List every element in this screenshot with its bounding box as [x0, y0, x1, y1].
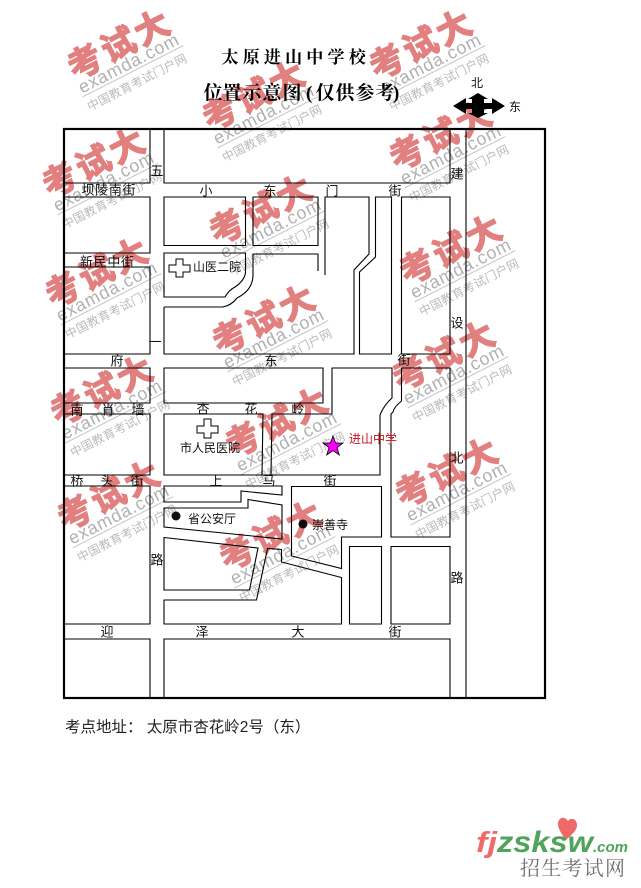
icon: temple dot	[298, 520, 308, 528]
road labels: 新民中街	[80, 254, 134, 270]
road labels: 街	[130, 474, 144, 488]
road labels	[70, 164, 464, 640]
watermark 10: examda.com	[400, 341, 507, 408]
watermark 15	[213, 494, 344, 605]
watermark 2: 中国教育考试门户网	[219, 102, 324, 165]
road labels: 五	[150, 164, 164, 178]
road labels: 泽	[195, 624, 209, 640]
icon: hospital cross city	[197, 419, 218, 438]
road labels: 门	[325, 184, 339, 198]
icon: public security dot	[172, 512, 180, 520]
watermark 6: 考试大	[204, 169, 318, 253]
watermark 13: 中国教育考试门户网	[74, 502, 179, 565]
watermark 11: examda.com	[58, 376, 165, 443]
watermark 3: 考试大	[364, 4, 478, 88]
watermark 9: 中国教育考试门户网	[229, 326, 334, 389]
road labels: 南	[70, 402, 84, 418]
watermark 15: 中国教育考试门户网	[236, 542, 341, 605]
icon: school star	[323, 436, 343, 455]
watermark 14: 中国教育考试门户网	[412, 479, 517, 542]
road labels: 杏	[196, 402, 210, 416]
watermark 9: 考试大	[207, 279, 321, 363]
watermark 11	[44, 349, 175, 460]
watermark 11: 考试大	[45, 350, 159, 434]
watermark 12	[219, 381, 350, 492]
watermark 13: examda.com	[65, 481, 172, 548]
road network and city blocks	[64, 129, 466, 698]
road labels: 大	[291, 624, 305, 640]
watermark 3: examda.com	[377, 30, 484, 97]
watermark 12: 中国教育考试门户网	[242, 429, 347, 492]
watermark 13: 考试大	[52, 455, 166, 539]
watermark 7: 考试大	[394, 209, 508, 293]
watermark 10	[386, 314, 517, 425]
road labels: 岭	[291, 402, 305, 416]
subtitle: 位置示意图(仅供参考)	[204, 81, 399, 104]
watermark 2: 考试大	[197, 55, 311, 139]
watermark 5: examda.com	[50, 148, 157, 215]
watermark 3	[363, 3, 494, 114]
watermark 11: 中国教育考试门户网	[67, 397, 172, 460]
road labels: 马	[262, 474, 276, 488]
label: jinshan school: 进山中学	[349, 431, 397, 446]
watermark 2: examda.com	[210, 81, 317, 148]
logo heart	[558, 818, 577, 840]
road labels: 一	[148, 334, 162, 350]
watermark 15: 考试大	[214, 495, 328, 579]
road labels: 北	[450, 450, 464, 466]
watermark 5: 中国教育考试门户网	[59, 169, 164, 232]
compass arrows	[453, 93, 505, 118]
watermark 7: examda.com	[407, 235, 514, 302]
watermark 9: examda.com	[220, 305, 327, 372]
road labels: 街	[323, 474, 337, 488]
watermark 5: 考试大	[37, 122, 151, 206]
label: public security bureau: 省公安厅	[188, 511, 236, 526]
watermark 4	[383, 94, 514, 205]
road labels: 府	[110, 354, 124, 368]
watermark 1	[61, 3, 192, 114]
road labels: 坝陵南街	[82, 182, 136, 198]
compass label north: 北	[471, 76, 483, 90]
road labels: 小	[199, 184, 213, 198]
watermark 2	[196, 54, 327, 165]
road labels: 墙	[131, 402, 145, 418]
watermark 15: examda.com	[227, 521, 334, 588]
road labels: 桥	[70, 474, 84, 488]
map	[64, 129, 545, 698]
map frame	[64, 129, 545, 698]
compass label east: 东	[509, 100, 521, 114]
watermark 7	[393, 208, 524, 319]
label: chongshan temple: 崇善寺	[312, 517, 348, 532]
watermark 1: 考试大	[62, 4, 176, 88]
label: shanyi second hospital: 山医二院	[193, 260, 241, 274]
site logo	[476, 818, 628, 880]
watermark 1: examda.com	[75, 30, 182, 97]
logo red letters: fj	[476, 827, 498, 859]
road labels: 上	[209, 474, 223, 488]
watermark 7: 中国教育考试门户网	[416, 256, 521, 319]
logo green letters: zsksw	[496, 826, 595, 859]
title: 太原进山中学校	[222, 47, 368, 67]
road labels: 街	[388, 184, 402, 198]
watermark 6: 中国教育考试门户网	[226, 216, 331, 279]
road labels: 路	[450, 570, 464, 586]
road labels: 东	[263, 184, 277, 198]
watermark 6	[203, 168, 334, 279]
watermark 1: 中国教育考试门户网	[84, 51, 189, 114]
logo tagline: 招生考试网	[520, 857, 625, 880]
watermark 4: examda.com	[397, 121, 504, 188]
road labels: 花	[244, 402, 258, 416]
road labels: 东	[264, 354, 278, 368]
road labels: 迎	[100, 624, 114, 640]
watermark 6: examda.com	[217, 195, 324, 262]
watermark 14: 考试大	[390, 432, 504, 516]
road labels: 街	[397, 352, 411, 368]
watermark 14	[389, 431, 520, 542]
logo domain suffix: .com	[593, 839, 628, 856]
road labels: 肖	[101, 402, 115, 418]
address: 考点地址： 太原市杏花岭2号（东）	[65, 718, 310, 736]
watermark 12: examda.com	[233, 408, 340, 475]
icon: hospital cross shanyi	[169, 259, 190, 277]
watermark 8: 中国教育考试门户网	[62, 279, 167, 342]
watermark 4: 中国教育考试门户网	[406, 142, 511, 205]
watermark 8: examda.com	[53, 258, 160, 325]
label: city hospital: 市人民医院	[180, 440, 240, 455]
watermark 10: 考试大	[387, 315, 501, 399]
watermark 14: examda.com	[403, 458, 510, 525]
watermark 4: 考试大	[384, 95, 498, 179]
road labels: 路	[150, 552, 164, 568]
road labels: 头	[100, 474, 114, 488]
watermark 3: 中国教育考试门户网	[386, 51, 491, 114]
watermarks	[36, 3, 524, 605]
road labels: 设	[450, 316, 464, 330]
watermark 9	[206, 278, 337, 389]
watermark 8: 考试大	[40, 232, 154, 316]
road labels: 街	[388, 624, 402, 640]
watermark 8	[39, 231, 170, 342]
road labels: 建	[450, 166, 464, 182]
watermark 12: 考试大	[220, 382, 334, 466]
watermark 5	[36, 121, 167, 232]
watermark 10: 中国教育考试门户网	[409, 362, 514, 425]
compass	[453, 76, 521, 118]
watermark 13	[51, 454, 182, 565]
